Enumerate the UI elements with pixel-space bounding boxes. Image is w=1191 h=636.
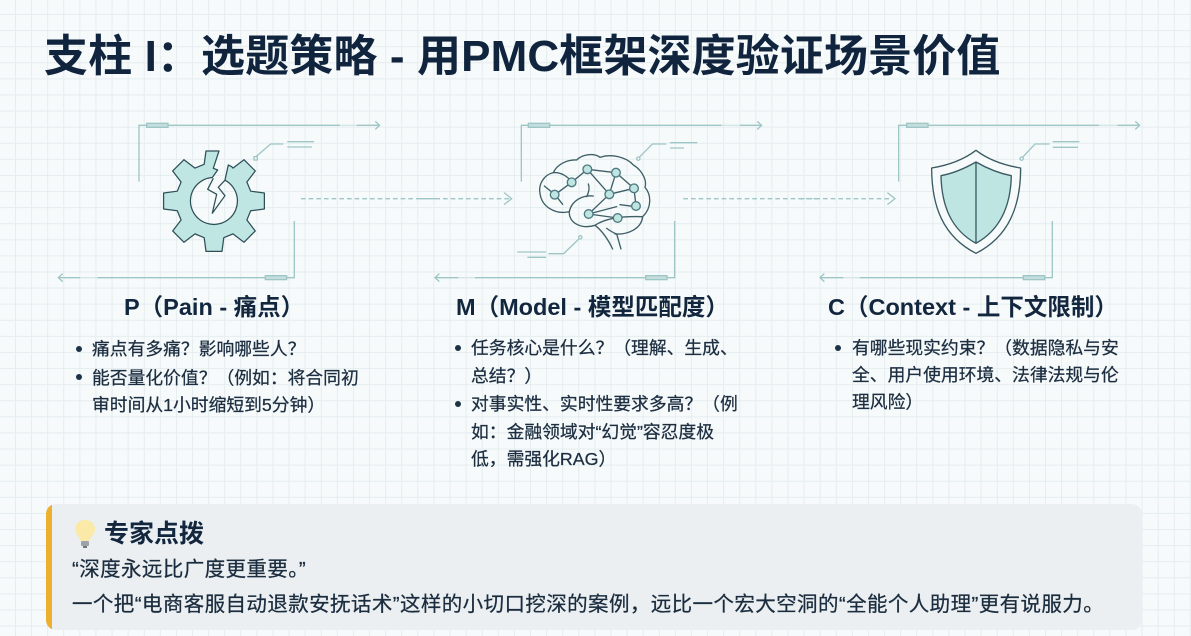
bullet list: M: 低，需强化RAG） <box>471 449 616 469</box>
bullet list: C: 理风险） <box>852 392 923 412</box>
title: 支柱 I：选题策略 - 用PMC框架深度验证场景价值 <box>44 32 1000 81</box>
callout heading: 专家点拨 <box>104 520 204 548</box>
icon: light bulb <box>75 520 95 548</box>
bullet list: M: 对事实性、实时性要求多高？（例 <box>471 394 738 414</box>
bullet list: P: 审时间从1小时缩短到5分钟） <box>92 395 325 415</box>
column: P <box>76 294 359 415</box>
bullet list: M: 任务核心是什么？（理解、生成、 <box>471 338 738 358</box>
bullet list: P <box>76 339 359 415</box>
bullet list: M: 如：金融领域对“幻觉”容忍度极 <box>471 422 714 442</box>
accent bar <box>46 504 52 630</box>
panel: C illustration <box>800 121 1140 282</box>
bullet list: P: 痛点有多痛？影响哪些人？ <box>92 339 305 359</box>
bullet list: M <box>455 338 738 469</box>
bullet list: P: 能否量化价值？（例如：将合同初 <box>92 368 359 388</box>
panel: P illustration <box>58 121 440 282</box>
column: C <box>828 294 1119 412</box>
connector frame: M <box>420 121 820 282</box>
icon: brain network <box>540 155 650 249</box>
connector frame: P <box>58 121 440 282</box>
callout quote: “深度永远比广度更重要。” <box>72 558 306 581</box>
heading: M: M（Model - 模型匹配度） <box>456 294 729 320</box>
bullet list: M: 总结？） <box>471 366 542 386</box>
panel: M illustration <box>420 121 820 282</box>
connector frame: C <box>800 121 1140 282</box>
column: M <box>455 294 738 469</box>
icon: shield <box>932 150 1021 253</box>
callout: expert tip <box>46 504 1142 630</box>
bullet list: C <box>835 338 1119 412</box>
callout body: 一个把“电商客服自动退款安抚话术”这样的小切口挖深的案例，远比一个宏大空洞的“全能个人助理”更有说服力。 <box>72 593 1104 616</box>
heading: C: C（Context - 上下文限制） <box>828 294 1118 320</box>
icon: broken gear <box>164 151 264 251</box>
heading: P: P（Pain - 痛点） <box>124 294 304 320</box>
bullet list: C: 有哪些现实约束？（数据隐私与安 <box>852 338 1119 358</box>
bullet list: C: 全、用户使用环境、法律法规与伦 <box>852 365 1119 385</box>
